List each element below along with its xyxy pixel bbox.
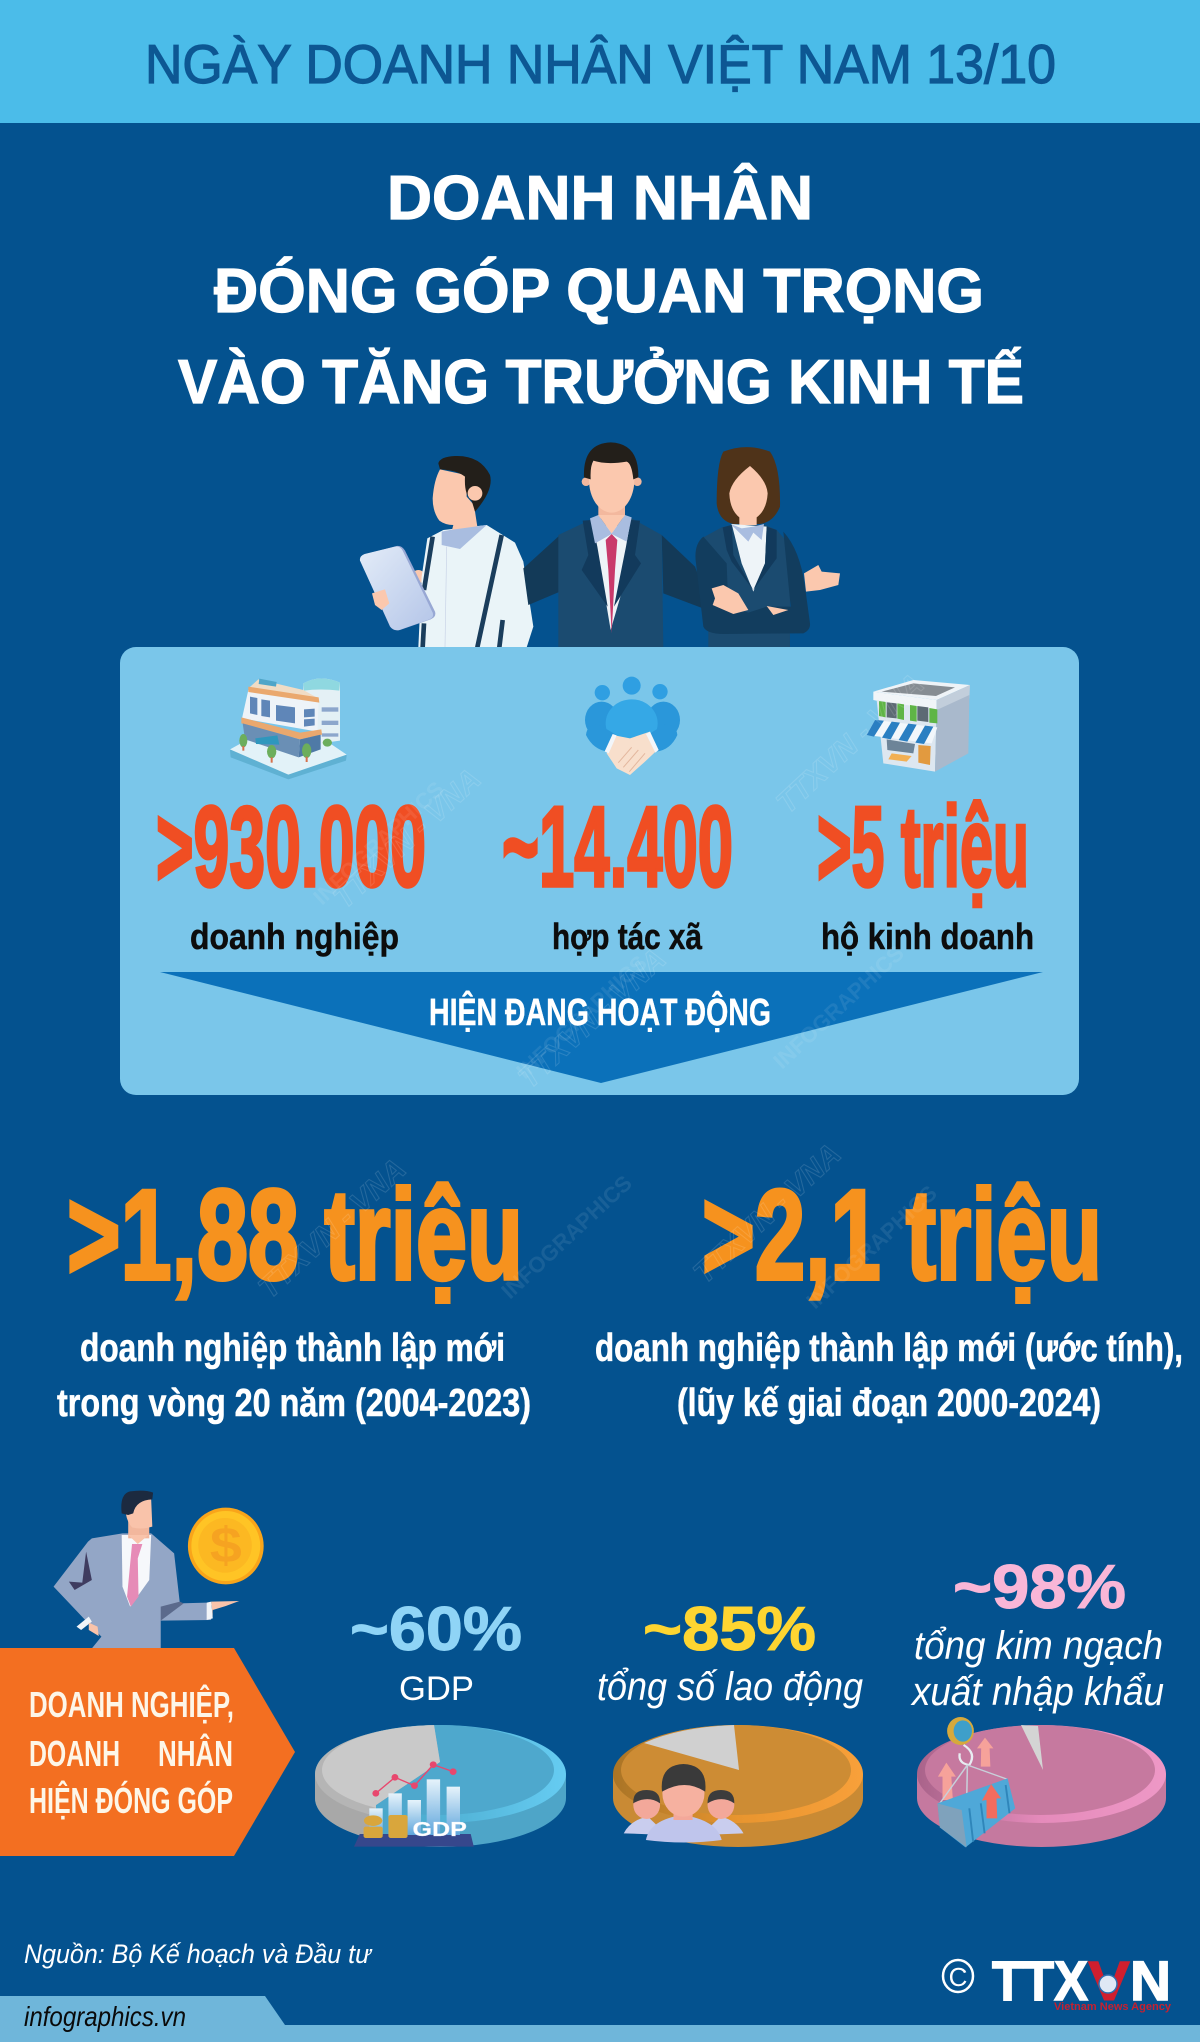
icon: container on a crane hook [938, 1717, 1015, 1847]
pie chart: trade 98 percent [917, 1717, 1166, 1847]
illustration: three business people [360, 442, 840, 647]
watermarks [252, 668, 942, 1314]
watermarks: TTXVN - VNA [770, 668, 931, 820]
banner: enterprises currently contribute: DOANH NGHIỆP, [29, 1683, 234, 1725]
arrow: currently operating [160, 972, 1043, 1083]
stat: accumulated new enterprises: (lũy kế giai đoạn 2000-2024) [677, 1382, 1101, 1425]
header title: NGÀY DOANH NHÂN VIỆT NAM 13/10 [145, 33, 1056, 95]
figure: woman with crossed arms [695, 447, 840, 647]
logo: TTXVN: N [1130, 1949, 1171, 2012]
banner: enterprises currently contribute: HIỆN ĐÓNG GÓP [29, 1779, 233, 1821]
figure: man in suit with red tie [523, 442, 712, 647]
stat: new enterprises in 20 years [57, 1164, 531, 1425]
logo: TTXVN: TTX [992, 1949, 1088, 2012]
banner: enterprises currently contribute: DOANH [29, 1733, 120, 1774]
logo: TTXVN: Vietnam News Agency [1054, 2001, 1172, 2013]
footer band [0, 1996, 1200, 2042]
stat: enterprises: doanh nghiệp [190, 916, 399, 957]
main title: VÀO TĂNG TRƯỞNG KINH TẾ [178, 348, 1024, 417]
watermarks: INFOGRAPHICS [768, 940, 909, 1074]
icon: office building [230, 678, 347, 779]
main title: DOANH NHÂN [387, 164, 813, 233]
logo: TTXVN [943, 1949, 1172, 2013]
icon: group of workers [624, 1764, 744, 1842]
stat: 98 percent import export: ~98% [953, 1553, 1126, 1622]
watermarks: TTXVN - VNA [327, 763, 488, 915]
banner: enterprises currently contribute [0, 1648, 295, 1856]
stat: cooperatives: hợp tác xã [552, 916, 703, 957]
watermarks: INFOGRAPHICS [308, 776, 449, 910]
logo: TTXVN: V [1088, 1949, 1130, 2012]
stat: 85 percent labour force: tổng số lao động [597, 1665, 863, 1709]
icon: GDP growth chart: GDP [413, 1818, 467, 1841]
pie chart: labour 85 percent [613, 1725, 863, 1847]
icon: shop house [867, 680, 970, 772]
stat: enterprises: >930.000 [156, 784, 426, 911]
figure: man in white shirt with tablet [360, 456, 533, 647]
stat: household businesses [817, 784, 1034, 957]
icon: gold coin: $ [210, 1518, 242, 1574]
stat: new enterprises in 20 years: doanh nghiệp thành lập mới [80, 1327, 505, 1370]
footer band: infographics.vn [24, 2001, 186, 2032]
stat: household businesses: hộ kinh doanh [821, 916, 1034, 957]
main title [178, 164, 1024, 417]
illustration: businessman presenting a coin [54, 1491, 264, 1648]
stat: new enterprises in 20 years: >1,88 triệu [67, 1164, 523, 1307]
watermarks: INFOGRAPHICS [801, 1180, 942, 1314]
icon: gold coin [188, 1508, 264, 1584]
watermarks: INFOGRAPHICS [511, 950, 652, 1084]
stat: 60 percent GDP [350, 1595, 522, 1708]
logo: TTXVN: C [949, 1962, 967, 1992]
watermarks: TTXVN - VNA [512, 943, 673, 1095]
pie chart: GDP 60 percent [315, 1725, 566, 1847]
panel: active businesses [120, 647, 1079, 1095]
stat: 98 percent import export: xuất nhập khẩu [910, 1670, 1164, 1714]
icon: GDP growth chart [354, 1761, 474, 1847]
icon: handshake group [585, 677, 680, 775]
banner: enterprises currently contribute: NHÂN [158, 1732, 233, 1774]
stat: 60 percent GDP: ~60% [350, 1595, 522, 1664]
stat: new enterprises in 20 years: trong vòng 20 năm (2004-2023) [57, 1382, 531, 1425]
stat: accumulated new enterprises [595, 1164, 1183, 1425]
stat: 85 percent labour force: ~85% [643, 1595, 816, 1664]
stat: enterprises [156, 784, 426, 957]
header band [0, 0, 1200, 123]
source note: Nguồn: Bộ Kế hoạch và Đầu tư [24, 1939, 373, 1969]
watermarks: TTXVN - VNA [687, 1138, 848, 1290]
stat: 98 percent import export [910, 1553, 1164, 1714]
stat: cooperatives: ~14.400 [502, 784, 733, 911]
watermarks: TTXVN - VNA [252, 1153, 413, 1305]
watermarks: INFOGRAPHICS [496, 1170, 637, 1304]
main title: ĐÓNG GÓP QUAN TRỌNG [214, 257, 984, 326]
arrow: currently operating: HIỆN ĐANG HOẠT ĐỘNG [429, 989, 771, 1034]
stat: 98 percent import export: tổng kim ngạch [914, 1624, 1163, 1668]
stat: 60 percent GDP: GDP [399, 1670, 474, 1708]
stat: cooperatives [502, 784, 733, 957]
stat: 85 percent labour force [597, 1595, 863, 1709]
